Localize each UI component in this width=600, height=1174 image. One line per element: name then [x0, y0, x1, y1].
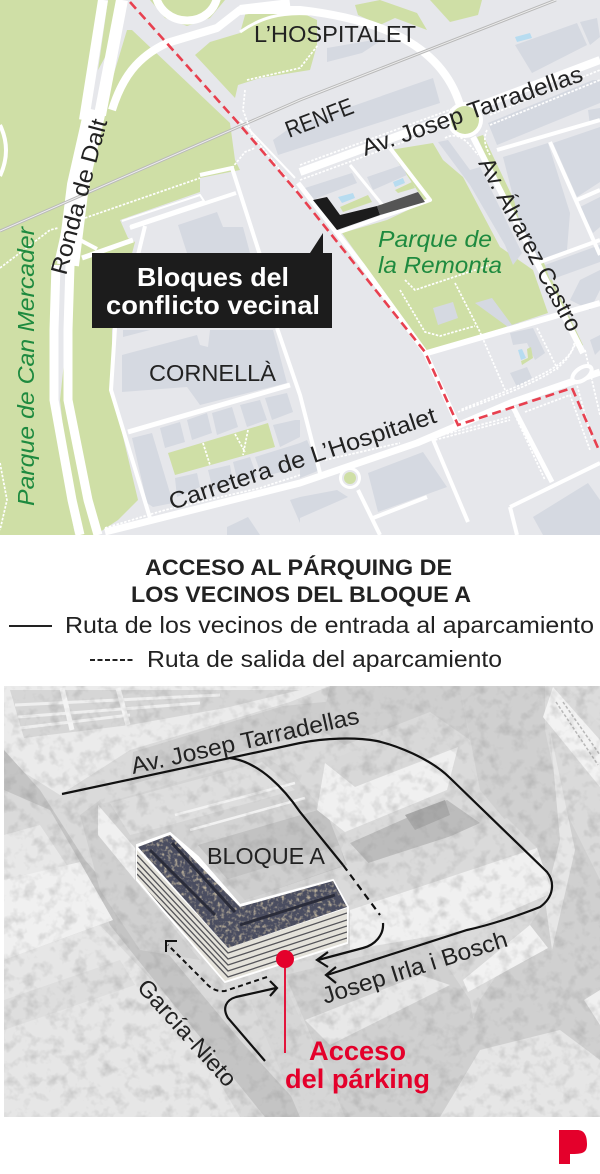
photo: courtyard	[198, 810, 347, 888]
photo: long right building	[337, 818, 552, 950]
photo label: Garcia-Nieto: García-Nieto	[132, 974, 242, 1092]
photo: main complex left facade	[98, 805, 135, 880]
map label: Cornella: CORNELLÀ	[149, 360, 276, 386]
marker: parking access	[276, 950, 294, 1053]
label: conflict blocks	[92, 233, 332, 328]
photo: top right building	[543, 686, 600, 787]
panel: aerial photo	[4, 686, 600, 1117]
photo label: Acceso del parking	[285, 1036, 430, 1094]
small roundabouts	[570, 364, 594, 384]
dotted paths	[0, 45, 600, 530]
map label: Carretera de L'Hospitalet: Carretera de L’Hospitalet	[165, 402, 440, 515]
photo: right trees	[460, 686, 600, 1060]
panel: location map	[0, 0, 600, 535]
photo: trees band	[80, 800, 200, 960]
route: exit dashed upper	[343, 865, 380, 915]
small green	[340, 182, 533, 365]
photo: texture overlay	[4, 686, 600, 1117]
map label: Av. Josep Tarradellas: Av. Josep Tarradellas	[358, 61, 586, 161]
photo: upper right building	[317, 747, 458, 832]
logo	[559, 1130, 587, 1164]
photo: light roof left	[4, 825, 66, 880]
photo: light top-left ground	[4, 686, 330, 795]
map label: Av. Alvarez Castro: Av. Álvarez Castro	[474, 153, 587, 336]
map label: Parque de Can Mercader: Parque de Can Mercader	[13, 226, 39, 506]
heading: parking access: LOS VECINOS DEL BLOQUE A	[131, 582, 471, 607]
route: parking exit dashed	[166, 941, 267, 991]
map label: Parque de la Remonta: la Remonta	[378, 252, 502, 278]
legend: exit route: Ruta de salida del aparcamiento	[147, 646, 502, 672]
map label: Parque de la Remonta	[378, 230, 502, 273]
photo: inner court	[350, 800, 480, 863]
route: entry main	[62, 739, 552, 983]
map label: Ronda de Dalt: Ronda de Dalt	[46, 116, 112, 277]
green areas	[0, 0, 583, 535]
photo: lower right building	[463, 925, 548, 992]
photo label: Acceso del parking: Acceso	[309, 1036, 406, 1066]
photo: main complex roof	[98, 757, 345, 905]
photo: lower centre strip	[292, 1097, 310, 1117]
heading: parking access: ACCESO AL PÁRQUING DE	[145, 555, 452, 580]
conflict blocks	[313, 192, 425, 230]
block A highlighted	[130, 830, 355, 982]
photo label: Acceso del parking: del párking	[285, 1064, 430, 1094]
photo: road bands	[130, 702, 326, 785]
photo: lower left warehouses	[4, 862, 113, 960]
road network	[0, 0, 600, 535]
route: entry branch	[230, 758, 383, 967]
railway	[0, 0, 556, 231]
photo: top-left building	[10, 688, 300, 738]
pools	[338, 33, 532, 360]
photo label: Bloque A: BLOQUE A	[207, 843, 325, 869]
border line	[130, 2, 598, 448]
legend: entry route: Ruta de los vecinos de entrada al aparcamiento	[65, 612, 594, 638]
photo label: Av. Josep Tarradellas: Av. Josep Tarradellas	[128, 703, 361, 779]
heading: parking access	[131, 555, 471, 607]
route: parking entry	[225, 981, 277, 1061]
map label: L'Hospitalet: L’HOSPITALET	[254, 21, 416, 47]
buildings	[122, 18, 600, 535]
map label: Parque de la Remonta: Parque de	[378, 226, 492, 252]
map label: Renfe: RENFE	[281, 93, 357, 143]
label: conflict blocks: Bloques del	[137, 262, 289, 292]
photo label: Josep Irla i Bosch: Josep Irla i Bosch	[319, 926, 511, 1009]
label: conflict blocks: conflicto vecinal	[106, 290, 320, 320]
